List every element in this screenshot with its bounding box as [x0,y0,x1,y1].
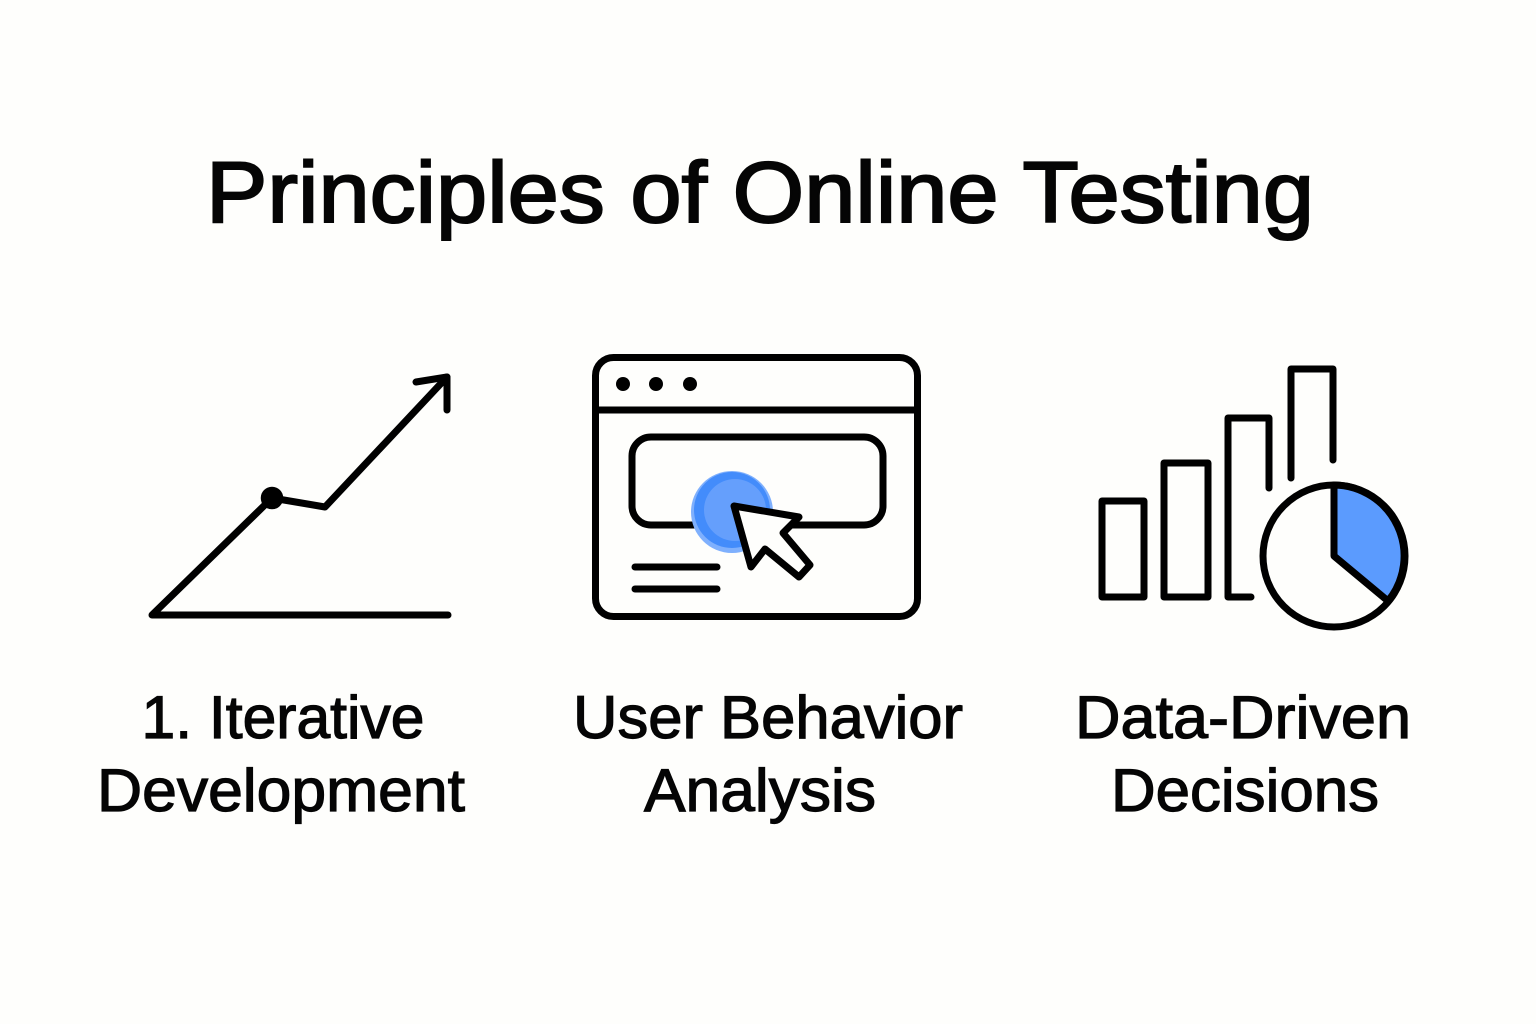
label: iterative development: 1. Iterative [142,684,424,751]
label: user behavior analysis: Analysis [644,757,876,824]
label: user behavior analysis [573,684,963,824]
icon: bar chart with pie chart [1102,369,1405,627]
icon: browser window with click [595,358,918,616]
label: user behavior analysis: User Behavior [573,684,963,751]
label: iterative development [97,684,465,824]
title: Principles of Online Testing [206,145,1314,241]
label: iterative development: Development [97,757,465,824]
label: data-driven decisions [1075,684,1411,824]
icon: rising line chart with arrow [152,377,448,615]
label: data-driven decisions: Decisions [1111,757,1379,824]
label: data-driven decisions: Data-Driven [1075,684,1411,751]
